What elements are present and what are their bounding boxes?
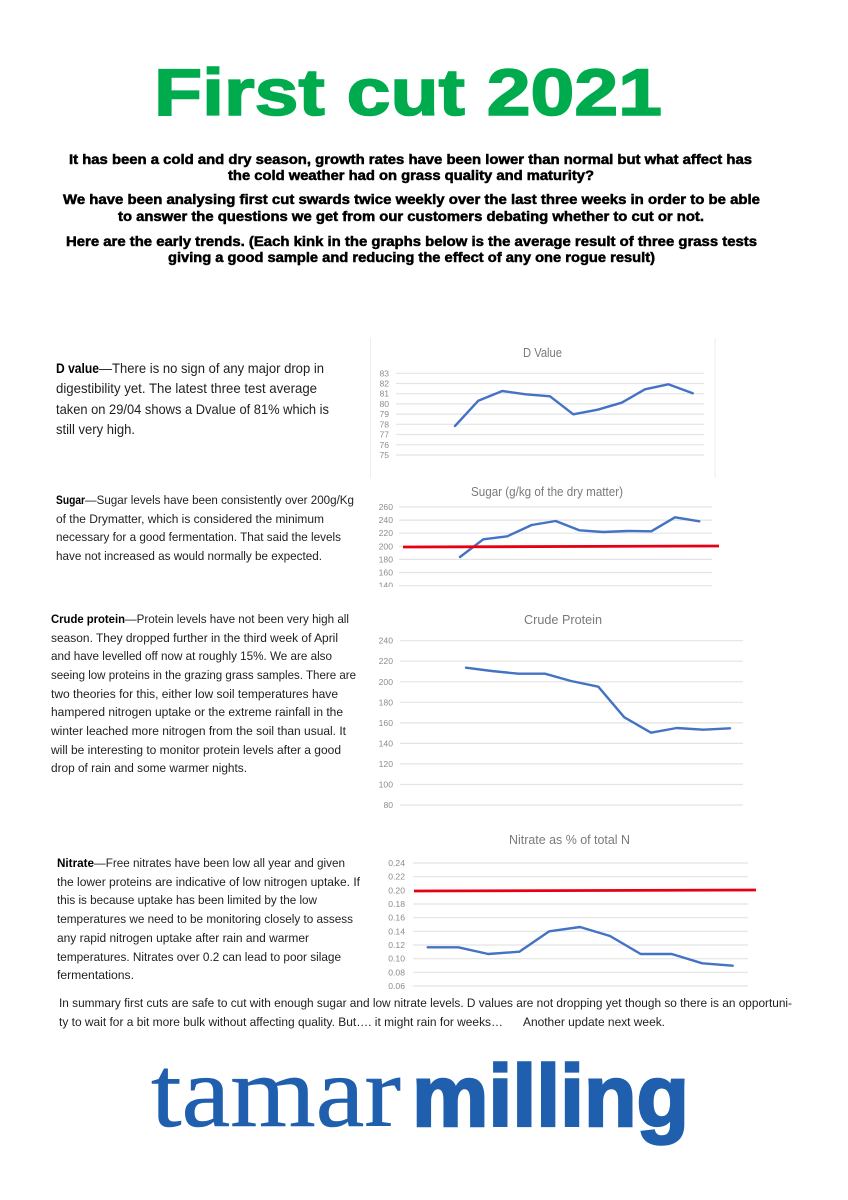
chart: D value: 83 — [379, 368, 389, 378]
summary text: ty to wait for a bit more bulk without affecting quality. But…. it might rain for weeks… — [59, 1015, 503, 1029]
text block: nitrate: the lower proteins are indicative of low nitrogen uptake. If — [57, 875, 361, 889]
chart: nitrate: 0.20 — [388, 885, 405, 895]
text block: D value: still very high. — [56, 421, 135, 437]
intro text: It has been a cold and dry season, growth rates have been lower than normal but what affect has — [69, 152, 752, 167]
chart: crude protein: 100 — [379, 780, 393, 790]
chart: nitrate: 0.18 — [388, 899, 405, 909]
text block: crude protein: —Protein levels have not been very high all — [125, 612, 349, 626]
text block: crude protein: will be interesting to monitor protein levels after a good — [50, 743, 341, 757]
text block: D value: —There is no sign of any major drop in — [99, 360, 324, 376]
chart: D value: 80 — [379, 399, 389, 409]
text block: sugar: necessary for a good fermentation. That said the levels — [56, 530, 341, 544]
chart: sugar: 140 — [379, 581, 393, 591]
text block: nitrate: temperatures we need to be monitoring closely to assess — [57, 912, 353, 926]
chart: crude protein: 220 — [379, 656, 393, 666]
text block: nitrate: temperatures. Nitrates over 0.2 can lead to poor silage — [57, 950, 341, 964]
chart: sugar: 200 — [379, 541, 393, 551]
intro text: the cold weather had on grass quality and maturity? — [228, 168, 594, 183]
text block: sugar: of the Drymatter, which is considered the minimum — [56, 512, 324, 526]
text block: crude protein: season. They dropped further in the third week of April — [51, 631, 338, 645]
logo: tamar milling: tamar — [151, 1036, 401, 1149]
chart: crude protein — [379, 613, 743, 810]
text block: sugar: —Sugar levels have been consistently over 200g/Kg — [85, 493, 354, 507]
chart: nitrate: 0.16 — [388, 913, 405, 923]
text block: nitrate: fermentations. — [57, 968, 134, 982]
text block: nitrate: any rapid nitrogen uptake after rain and warmer — [57, 931, 309, 945]
text block: sugar — [56, 493, 354, 563]
text block: sugar: have not increased as would normally be expected. — [56, 549, 322, 563]
chart: sugar — [379, 485, 719, 591]
chart: sugar: 180 — [379, 554, 393, 564]
chart: D value: D Value — [523, 346, 562, 360]
text block: crude protein: drop of rain and some warmer nights. — [51, 761, 247, 775]
intro text: Here are the early trends. (Each kink in the graphs below is the average result of three grass tests — [66, 234, 757, 249]
text block: nitrate: —Free nitrates have been low all year and given — [94, 856, 345, 870]
chart: crude protein: 180 — [379, 697, 393, 707]
text block: D value: digestibility yet. The latest three test average — [56, 380, 317, 396]
text block: nitrate — [57, 856, 361, 982]
chart: crude protein: 140 — [379, 738, 393, 748]
chart: nitrate: 0.12 — [388, 940, 405, 950]
intro text — [63, 152, 761, 265]
logo: tamar milling: milling — [412, 1048, 689, 1145]
chart: D value: 75 — [379, 450, 389, 460]
chart: D value: 78 — [379, 419, 389, 429]
text block: crude protein: seeing low proteins in the grazing grass samples. There are — [51, 668, 356, 682]
text block: crude protein: winter leached more nitrogen from the soil than usual. It — [50, 724, 347, 738]
intro text: giving a good sample and reducing the effect of any one rogue result) — [168, 250, 655, 265]
chart: nitrate: 0.24 — [388, 858, 405, 868]
text block: crude protein: hampered nitrogen uptake or the extreme rainfall in the — [51, 705, 343, 719]
text block: crude protein: Crude protein — [51, 612, 125, 626]
chart: nitrate: 0.06 — [388, 981, 405, 991]
chart: crude protein: 80 — [383, 800, 393, 810]
chart: crude protein: 240 — [379, 636, 393, 646]
chart: D value: 81 — [379, 389, 389, 399]
chart: crude protein: Crude Protein — [524, 613, 602, 627]
text block: crude protein — [50, 612, 356, 775]
text block: D value: taken on 29/04 shows a Dvalue of 81% which is — [56, 401, 329, 417]
text block: D value — [56, 360, 329, 437]
chart: nitrate: 0.22 — [388, 872, 405, 882]
chart: sugar: 160 — [379, 568, 393, 578]
summary text: Another update next week. — [523, 1015, 665, 1029]
chart: D value: 79 — [379, 409, 389, 419]
chart: D value — [370, 338, 715, 478]
text block: D value: D value — [56, 360, 99, 376]
intro text: We have been analysing first cut swards twice weekly over the last three weeks in order to be able — [63, 192, 761, 207]
chart: D value: 82 — [379, 378, 389, 388]
text block: crude protein: two theories for this, either low soil temperatures have — [51, 687, 338, 701]
chart: nitrate: 0.10 — [388, 954, 405, 964]
text block: sugar: Sugar — [56, 493, 85, 507]
chart: crude protein: 120 — [379, 759, 393, 769]
chart: crude protein: 200 — [379, 677, 393, 687]
chart: nitrate: 0.08 — [388, 967, 405, 977]
title: First cut 2021 — [154, 55, 662, 129]
chart: D value: 77 — [379, 430, 389, 440]
chart: sugar: Sugar (g/kg of the dry matter) — [471, 485, 623, 499]
chart: sugar: 260 — [379, 502, 393, 512]
chart: sugar: 220 — [379, 528, 393, 538]
chart: nitrate — [388, 833, 756, 991]
chart: nitrate: Nitrate as % of total N — [509, 833, 630, 847]
chart: crude protein: 160 — [379, 718, 393, 728]
chart: nitrate: 0.14 — [388, 926, 405, 936]
intro text: to answer the questions we get from our customers debating whether to cut or not. — [118, 209, 704, 224]
text block: crude protein: and have levelled off now at roughly 15%. We are also — [51, 649, 332, 663]
chart: sugar: 240 — [379, 515, 393, 525]
logo: tamar milling — [151, 1036, 689, 1149]
summary text — [59, 996, 792, 1029]
text block: nitrate: this is because uptake has been limited by the low — [57, 893, 317, 907]
chart: D value: 76 — [379, 440, 389, 450]
text block: nitrate: Nitrate — [57, 856, 94, 870]
summary text: In summary first cuts are safe to cut with enough sugar and low nitrate levels. D values are not dropping yet though so there is an opportuni- — [59, 996, 792, 1010]
